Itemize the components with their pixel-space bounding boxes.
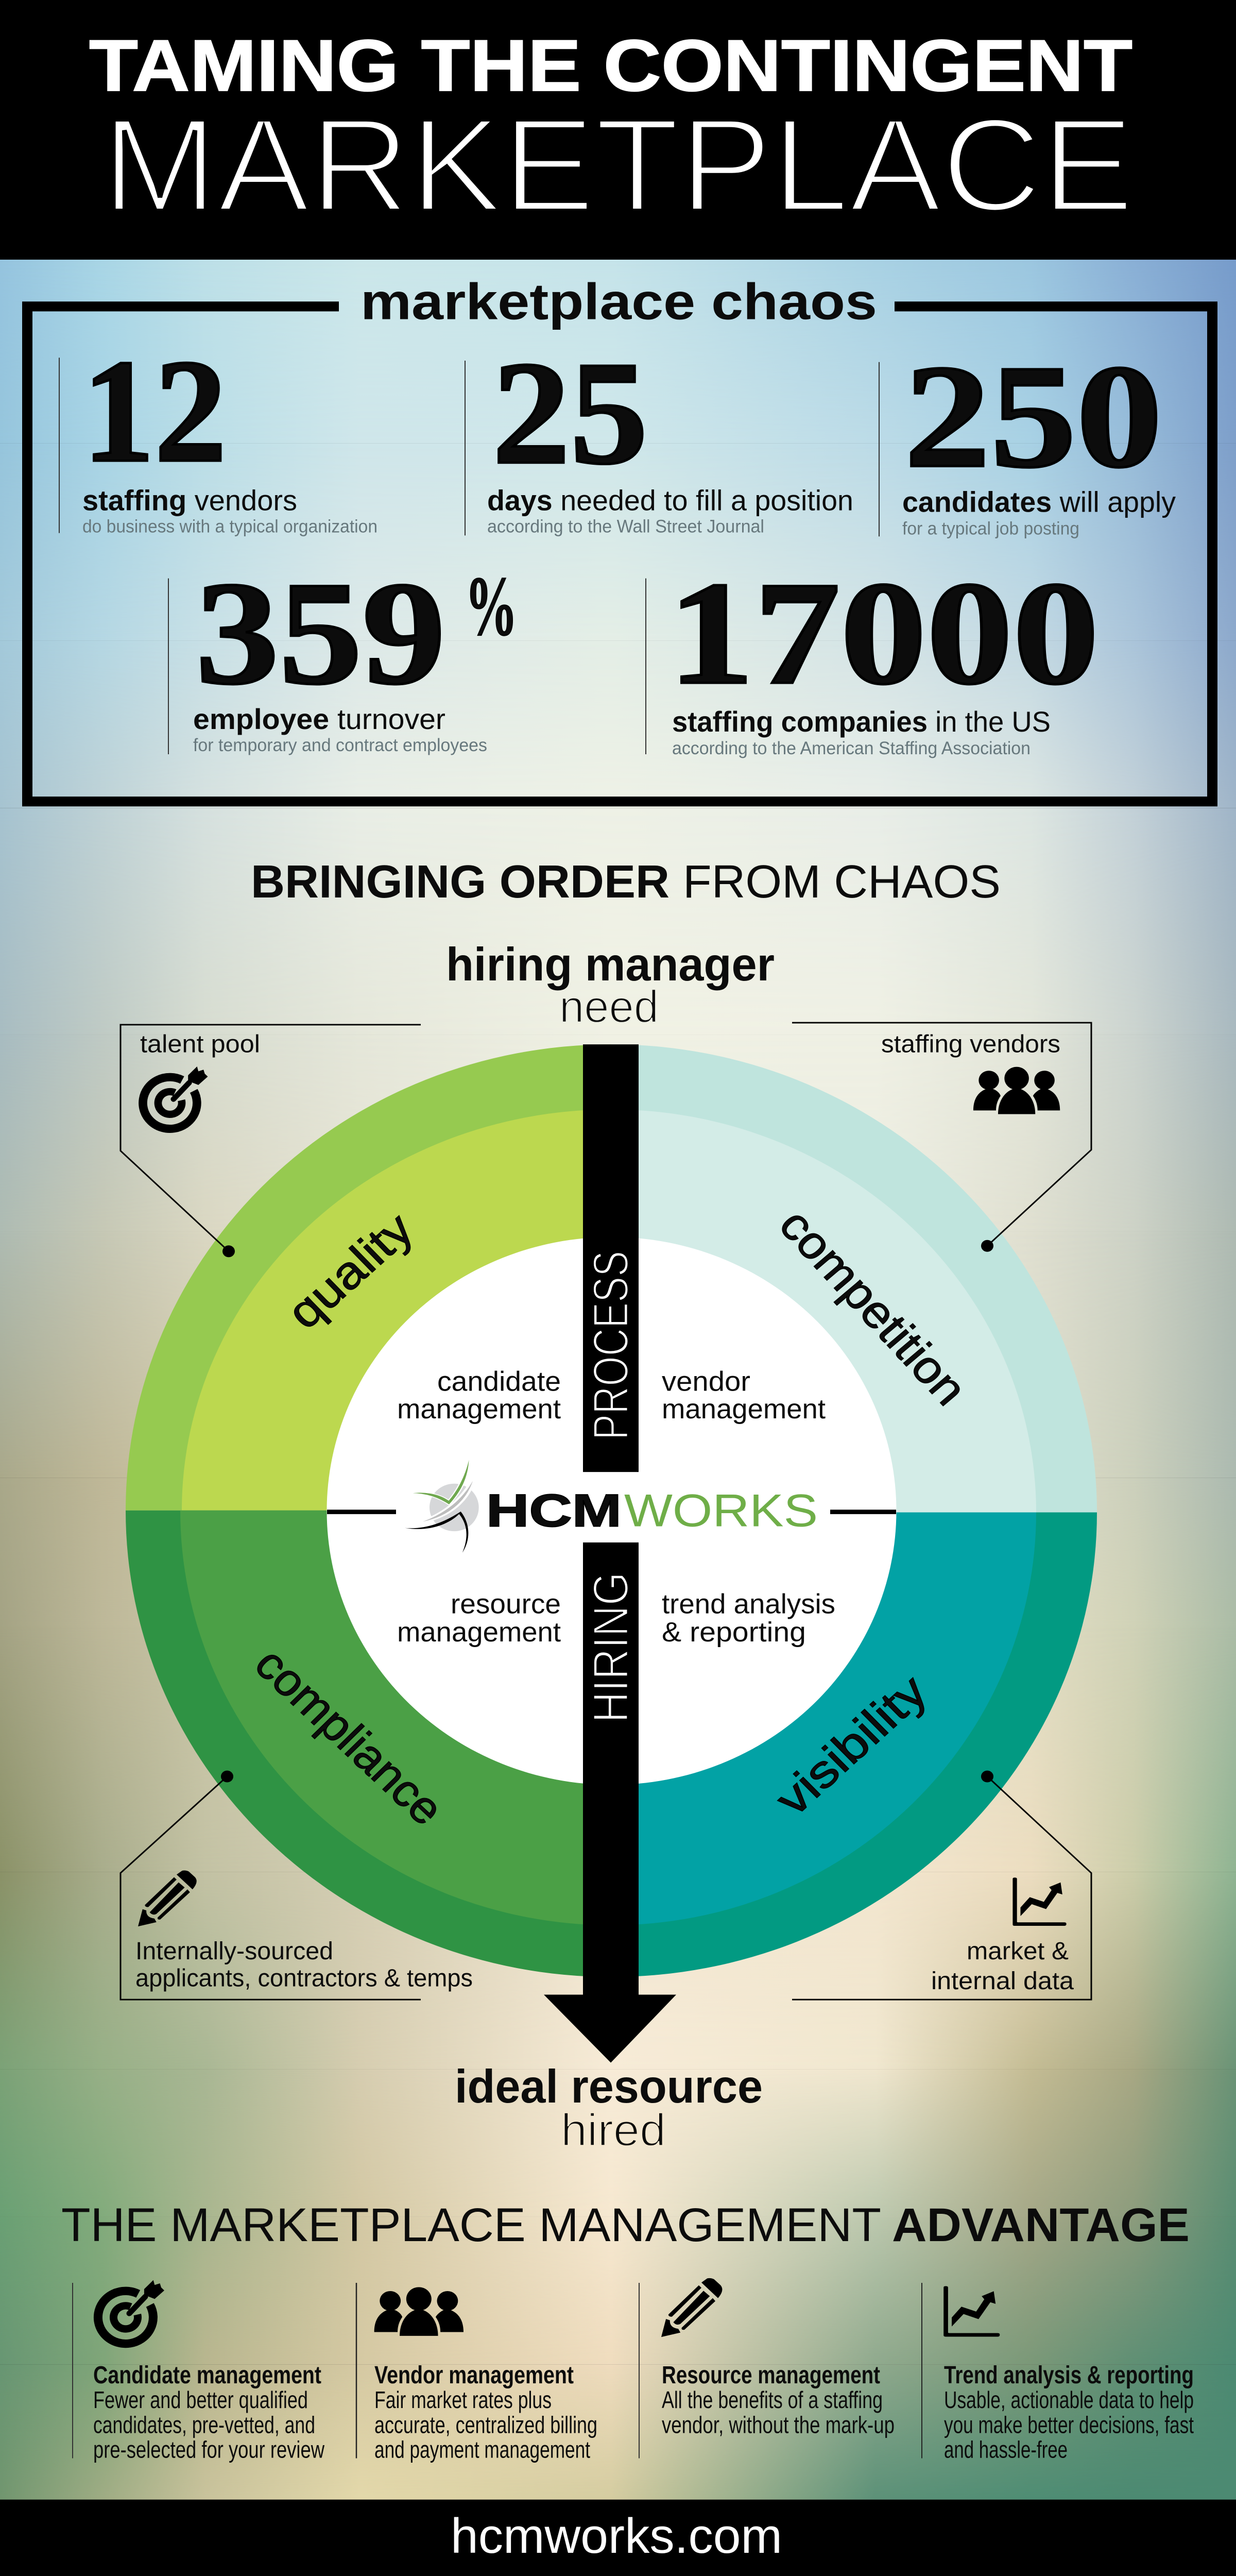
column: candidate management: pre-selected for your review	[93, 2436, 325, 2463]
stat: 17000 staffing companies: staffing companies in the US	[672, 706, 1051, 738]
stat: 12 staffing vendors: do business with a typical organization	[82, 516, 377, 536]
centre label: resource management: management	[397, 1616, 561, 1648]
label: competition: competition	[769, 1199, 977, 1415]
callout: internally-sourced applicants: Internally-sourced	[135, 1938, 333, 1965]
centre label: candidate management: management	[397, 1393, 561, 1425]
column: vendor management	[356, 2283, 597, 2463]
label: compliance: compliance	[245, 1638, 453, 1835]
icon: pencil	[661, 2278, 722, 2337]
stat: 359% turnover: %	[465, 560, 518, 653]
heading: marketplace chaos: marketplace chaos	[360, 273, 877, 330]
logo emblem	[405, 1452, 479, 1553]
stat: 12 staffing vendors: staffing vendors	[82, 485, 297, 517]
callout: staffing vendors: staffing vendors	[881, 1030, 1060, 1058]
title line 1: TAMING THE CONTINGENT	[89, 25, 1132, 106]
centre white disc	[327, 1237, 896, 1785]
label: hiring manager need	[446, 938, 775, 1032]
heading: bringing order from chaos: BRINGING ORDER	[251, 856, 670, 908]
icon: pencil	[138, 1870, 197, 1926]
column: resource management: All the benefits of a staffing	[662, 2386, 883, 2413]
process bar: PROCESS	[583, 1251, 639, 1440]
stat: 25 days: 25	[492, 331, 648, 495]
callout: market and internal data	[792, 1771, 1091, 1999]
centre label: resource management: resource	[451, 1588, 561, 1619]
stat: 250 candidates: candidates will apply	[902, 487, 1176, 518]
chart: process wheel	[126, 1044, 1097, 2063]
callout: staffing vendors	[792, 1023, 1091, 1252]
stat: 25 days: according to the Wall Street Journal	[487, 516, 764, 536]
label: quality: quality	[278, 1204, 423, 1338]
callout: talent pool: talent pool	[140, 1030, 260, 1058]
logo: HCM Works: HCM	[486, 1485, 622, 1536]
heading: bringing order from chaos: FROM CHAOS	[683, 856, 1001, 908]
column: candidate management: Candidate management	[93, 2362, 321, 2389]
heading: the marketplace management advantage: THE MARKETPLACE MANAGEMENT	[61, 2198, 881, 2251]
column: vendor management: accurate, centralized billing	[374, 2412, 597, 2438]
stat: 12 staffing vendors	[59, 329, 377, 536]
column: candidate management	[73, 2280, 325, 2463]
footer banner	[0, 2500, 1236, 2576]
segment: visibility	[611, 1513, 1097, 1977]
stat: 359% turnover: 359	[196, 551, 445, 715]
stat: 17000 staffing companies: 17000	[668, 551, 1099, 715]
callout: talent pool	[121, 1025, 421, 1257]
callout: market and internal data: market &	[967, 1938, 1069, 1965]
stat: 25 days	[465, 331, 853, 536]
heading: the marketplace management advantage: ADVANTAGE	[892, 2198, 1190, 2251]
centre label: candidate management	[397, 1366, 561, 1425]
icon: people	[973, 1067, 1060, 1114]
column: trend analysis and reporting	[922, 2283, 1194, 2463]
centre label: vendor management: management	[662, 1393, 826, 1425]
icon: people	[374, 2287, 464, 2336]
centre label: candidate management: candidate	[437, 1366, 561, 1397]
column: candidate management: Fewer and better qualified	[93, 2386, 308, 2413]
logo: HCM Works	[405, 1452, 818, 1553]
title line 2: MARKETPLACE	[102, 91, 1134, 239]
heading: bringing order from chaos	[251, 856, 1001, 908]
label: ideal resource hired: ideal resource	[455, 2060, 763, 2113]
header banner	[0, 0, 1236, 260]
callout: internally-sourced applicants	[121, 1771, 473, 1999]
stat: 359% turnover: employee turnover	[193, 704, 445, 736]
stat: 359% turnover: for temporary and contract employees	[193, 735, 487, 755]
stat: 17000 staffing companies	[646, 551, 1099, 758]
stat: 17000 staffing companies: according to the American Staffing Association	[672, 738, 1031, 758]
callout: internally-sourced applicants: applicants, contractors & temps	[135, 1964, 473, 1992]
column: resource management: vendor, without the mark-up	[662, 2412, 895, 2438]
label: hiring manager need: need	[559, 982, 659, 1032]
process bar	[583, 1044, 639, 1472]
segment: quality	[126, 1044, 611, 1511]
stat: 359% turnover	[168, 551, 518, 755]
centre label: trend analysis and reporting: trend analysis	[662, 1588, 835, 1619]
stat: 25 days: days needed to fill a position	[487, 485, 853, 517]
hiring arrow	[544, 1543, 676, 2063]
stat: 250 candidates	[879, 334, 1176, 538]
segment: compliance	[126, 1511, 611, 1977]
callout: market and internal data: internal data	[931, 1968, 1074, 1995]
centre label: vendor management: vendor	[662, 1366, 750, 1397]
column: vendor management: Vendor management	[374, 2362, 574, 2389]
stat: 250 candidates: 250	[904, 334, 1162, 498]
icon: target	[98, 2280, 164, 2344]
icon: trend chart	[1012, 1877, 1067, 1926]
centre label: trend analysis and reporting: & reporting	[662, 1616, 806, 1648]
icon: target	[143, 1066, 208, 1129]
segment: competition	[611, 1044, 1097, 1513]
label: ideal resource hired	[455, 2060, 763, 2156]
icon: trend chart	[943, 2286, 1000, 2336]
column: resource management	[639, 2278, 895, 2458]
label: visibility: visibility	[766, 1666, 937, 1825]
logo: HCM Works: WORKS	[624, 1485, 818, 1536]
hiring arrow: HIRING	[583, 1572, 639, 1723]
footer url: hcmworks.com	[451, 2508, 782, 2564]
label: ideal resource hired: hired	[561, 2105, 666, 2156]
column: trend analysis and reporting: and hassle-free	[944, 2436, 1068, 2463]
centre label: trend analysis and reporting	[662, 1588, 835, 1648]
centre label: vendor management	[662, 1366, 826, 1425]
column: vendor management: Fair market rates plus	[374, 2386, 552, 2413]
stat: 250 candidates: for a typical job posting	[902, 518, 1079, 538]
column: resource management: Resource management	[662, 2362, 880, 2389]
centre label: resource management	[397, 1588, 561, 1648]
column: vendor management: and payment management	[374, 2436, 590, 2463]
column: candidate management: candidates, pre-vetted, and	[93, 2412, 315, 2438]
label: hiring manager need: hiring manager	[446, 938, 775, 990]
panel: marketplace chaos	[27, 273, 1212, 802]
stat: 12 staffing vendors: 12	[82, 329, 227, 493]
